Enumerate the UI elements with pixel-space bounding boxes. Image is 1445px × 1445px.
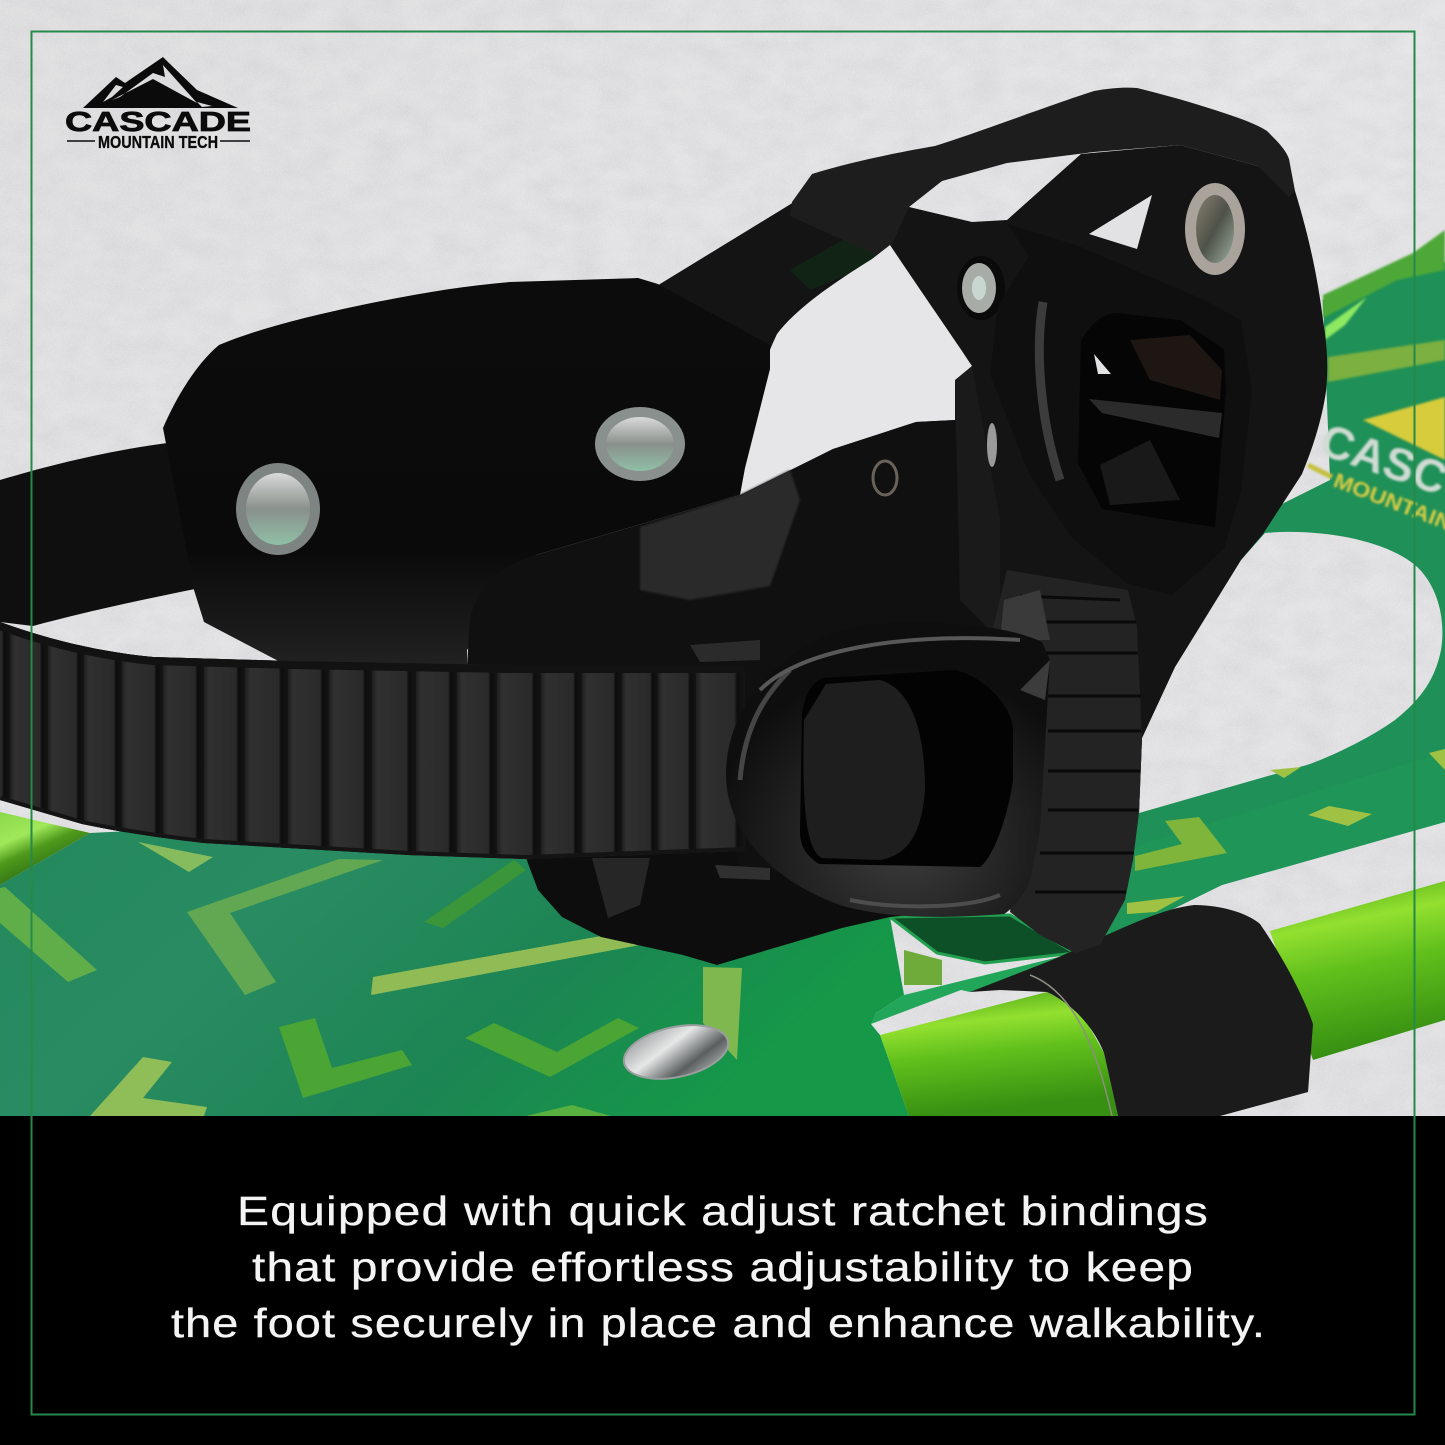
snow through binding bbox=[742, 245, 972, 495]
deck stripe bbox=[1328, 340, 1445, 382]
deck lip bbox=[871, 938, 1120, 1024]
logo: Cascade Mountain Tech bbox=[65, 57, 251, 152]
black caption band bbox=[0, 1116, 1445, 1445]
lower ratchet buckle bbox=[715, 623, 1050, 917]
caption text: that provide effortless adjustability to keep bbox=[252, 1244, 1194, 1290]
ratchet lever bbox=[990, 570, 1142, 953]
heel cup leather panel bbox=[163, 278, 770, 668]
caption text: Equipped with quick adjust ratchet bindings bbox=[237, 1188, 1209, 1234]
logo tagline: MOUNTAIN TECH bbox=[98, 132, 218, 152]
aluminium tube, front bbox=[880, 881, 1445, 1116]
snow background bbox=[0, 0, 1445, 1120]
upper ratchet buckle bbox=[990, 224, 1252, 595]
left tube bbox=[0, 812, 90, 885]
snowshoe deck, lower bbox=[0, 830, 942, 1116]
snowshoe deck, upper right bbox=[1100, 230, 1445, 945]
small green plate under binding bbox=[890, 915, 1075, 963]
ratchet strap bbox=[0, 615, 745, 865]
caption text bbox=[171, 1188, 1266, 1346]
deck logo text: MOUNTAIN bbox=[1330, 469, 1445, 535]
deck yellow mountain bbox=[1363, 397, 1445, 460]
back heel strap bbox=[0, 442, 200, 626]
lower binding plate bbox=[526, 850, 1010, 965]
ratchet base plate bbox=[467, 366, 1005, 880]
deck chevrons bbox=[187, 859, 383, 995]
logo mountain bbox=[83, 57, 238, 108]
rivets bbox=[236, 183, 1245, 1087]
velcro tube strap bbox=[970, 905, 1313, 1116]
toe webbing strap bbox=[790, 88, 1295, 259]
caption text: the foot securely in place and enhance walkability. bbox=[171, 1300, 1266, 1346]
deck chevrons right bbox=[1135, 817, 1227, 871]
frame tube rim bbox=[1323, 230, 1445, 318]
logo wordmark: CASCADE bbox=[65, 106, 251, 137]
green reflection bbox=[790, 230, 885, 290]
binding back plate bbox=[640, 145, 1327, 813]
